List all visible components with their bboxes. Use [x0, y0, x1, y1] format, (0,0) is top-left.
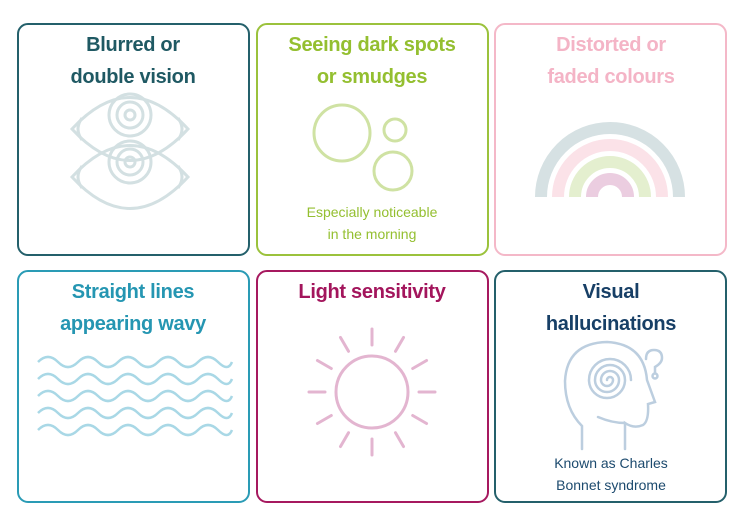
note: Charles Bonnet: Bonnet syndrome	[556, 477, 666, 493]
panel: blurred vision	[18, 24, 249, 255]
icon: waves	[38, 357, 232, 435]
icon: sun	[309, 329, 435, 455]
note: morning: in the morning	[328, 226, 416, 242]
heading: wavy: appearing wavy	[60, 313, 207, 335]
icon: circles	[314, 105, 412, 190]
note: morning: Especially noticeable	[307, 204, 438, 220]
panel: light sensitivity	[257, 271, 488, 502]
icon: head with spiral	[565, 342, 662, 449]
heading: wavy: Straight lines	[72, 281, 194, 303]
heading: blurred: Blurred or	[86, 34, 180, 56]
heading: light: Light sensitivity	[298, 281, 447, 303]
panel: wavy lines	[18, 271, 249, 502]
heading: colours: faded colours	[547, 66, 675, 88]
icon: double eye	[72, 94, 188, 208]
panel: dark spots	[257, 24, 488, 255]
panel: distorted colours	[495, 24, 726, 255]
icon: rainbow	[541, 128, 679, 197]
note: Charles Bonnet: Known as Charles	[554, 455, 668, 471]
panel: hallucinations	[495, 271, 726, 502]
heading: hallucinations: Visual	[583, 281, 639, 303]
heading: blurred: double vision	[70, 66, 196, 88]
heading: colours: Distorted or	[556, 34, 666, 56]
heading: dark spots: Seeing dark spots	[288, 34, 456, 56]
heading: hallucinations: hallucinations	[546, 313, 676, 335]
heading: dark spots: or smudges	[317, 66, 427, 88]
